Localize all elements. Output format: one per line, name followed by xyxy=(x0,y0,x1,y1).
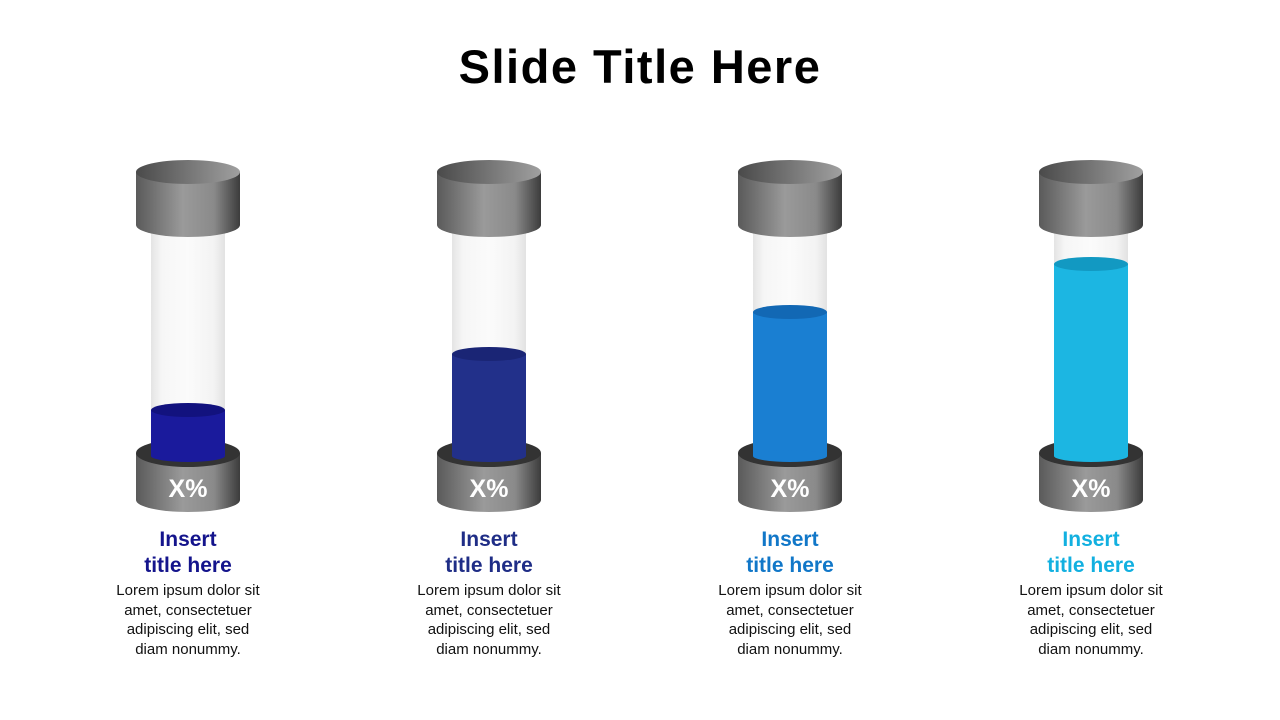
caption 4: adipiscing elit, sed xyxy=(1030,621,1152,638)
caption 4: Insert xyxy=(1062,528,1120,551)
caption 1: Lorem ipsum dolor sit xyxy=(116,582,260,599)
caption 2: adipiscing elit, sed xyxy=(428,621,550,638)
caption 3: Insert xyxy=(761,528,819,551)
caption 4 xyxy=(1019,528,1163,658)
caption 3: diam nonummy. xyxy=(737,640,843,658)
tube 4 xyxy=(1039,160,1143,512)
caption 2: Lorem ipsum dolor sit xyxy=(417,582,561,599)
caption 1: amet, consectetuer xyxy=(124,602,252,618)
caption 3: amet, consectetuer xyxy=(726,602,854,618)
caption 2: amet, consectetuer xyxy=(425,602,553,618)
tube 3 xyxy=(738,160,842,512)
tube 3: X% xyxy=(771,475,809,503)
caption 1: title here xyxy=(144,554,232,577)
caption 1: Insert xyxy=(159,528,217,551)
tube 2 xyxy=(437,160,541,512)
caption 3: title here xyxy=(746,554,834,577)
caption 4: Lorem ipsum dolor sit xyxy=(1019,582,1163,599)
caption 1 xyxy=(116,528,260,658)
caption 1: adipiscing elit, sed xyxy=(127,621,249,638)
caption 3 xyxy=(718,528,862,658)
caption 2: title here xyxy=(445,554,533,577)
caption 2 xyxy=(417,528,561,658)
caption 4: diam nonummy. xyxy=(1038,640,1144,658)
caption 2: Insert xyxy=(460,528,518,551)
caption 4: title here xyxy=(1047,554,1135,577)
caption 1: diam nonummy. xyxy=(135,640,241,658)
tube 1 xyxy=(136,160,240,512)
title: Slide Title Here xyxy=(459,40,821,93)
caption 4: amet, consectetuer xyxy=(1027,602,1155,618)
tube 1: X% xyxy=(169,475,207,503)
caption 3: Lorem ipsum dolor sit xyxy=(718,582,862,599)
caption 2: diam nonummy. xyxy=(436,640,542,658)
tube 2: X% xyxy=(470,475,508,503)
tube 4: X% xyxy=(1072,475,1110,503)
caption 3: adipiscing elit, sed xyxy=(729,621,851,638)
